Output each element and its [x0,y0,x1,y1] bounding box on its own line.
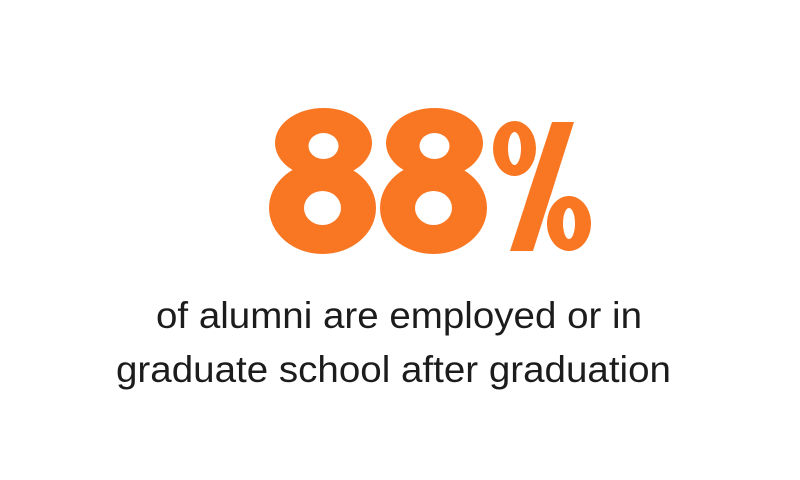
first digit 8 [269,76,376,288]
first digit 8: 8 [285,76,363,288]
infographic [118,108,668,390]
second digit 8: 8 [396,76,474,288]
caption line 2: graduate school after graduation [116,349,671,390]
headline statistic: 88% [269,108,591,254]
caption line 1: of alumni are employed or in [156,295,642,336]
caption [116,295,671,390]
percent sign: % [497,96,587,286]
second digit 8 [380,76,487,288]
percent sign [493,121,591,251]
